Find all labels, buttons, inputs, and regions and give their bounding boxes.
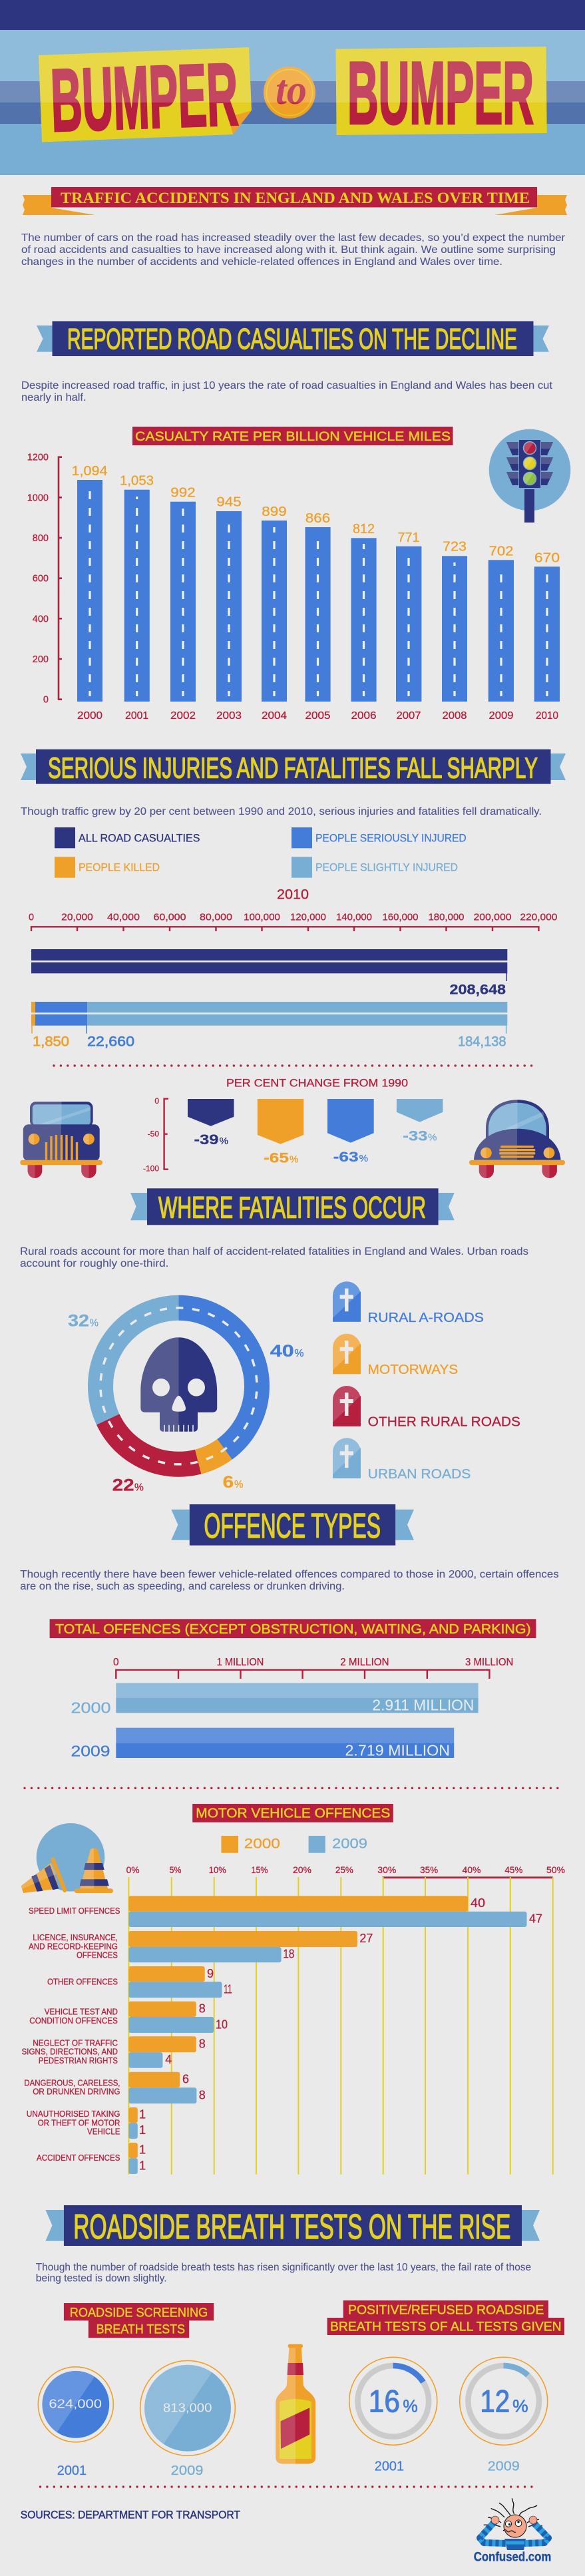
row: dangerous driving: OR DRUNKEN DRIVING xyxy=(33,2087,120,2097)
label 6%: 6 xyxy=(223,1473,234,1492)
shield: slightly injured: -33 xyxy=(403,1128,427,1144)
icon: traffic cones xyxy=(21,1823,113,1893)
fallen cone xyxy=(21,1859,65,1893)
icon: truck xyxy=(20,1102,102,1178)
chart year: 2010 xyxy=(277,887,309,903)
section text: fatalities: Rural roads account for more than half of accident-related fatalities in England and Wales. Urban roads xyxy=(20,1246,528,1257)
row: unauthorised taking: 1 xyxy=(139,2123,146,2137)
x axis: 1 MILLION xyxy=(217,1657,264,1668)
tombstone: other rural roads xyxy=(333,1386,520,1430)
y axis: 400 xyxy=(33,614,49,624)
x axis: 20,000 xyxy=(61,912,93,923)
x axis xyxy=(29,912,557,931)
chart title: positive or refused tests: POSITIVE/REFUSED ROADSIDE xyxy=(348,2303,544,2318)
shield: slightly injured: % xyxy=(428,1132,437,1143)
bar 2001: 1,053 xyxy=(120,474,154,489)
x axis: 100,000 xyxy=(244,912,280,923)
row: neglect of traffic signs: PEDESTRIAN RIGHTS xyxy=(39,2056,118,2065)
label 40% xyxy=(270,1342,303,1361)
ring: 16% in 2001: % xyxy=(403,2396,418,2416)
bar 2003: 2003 xyxy=(216,710,242,722)
bar 2006: 2006 xyxy=(351,710,377,722)
legend: years: 2000 xyxy=(244,1835,280,1851)
row: dangerous driving: 6 xyxy=(182,2073,189,2086)
row: other offences: 9 xyxy=(207,1967,214,1980)
logo: Confused.com: Confused.com xyxy=(474,2550,551,2564)
intro text: of road accidents and casualties to have increased along with it. But think again. We outline some surprising xyxy=(21,244,556,256)
x axis xyxy=(126,1864,565,1878)
x axis: 15% xyxy=(252,1864,268,1875)
ring: 12% in 2009: 2009 xyxy=(488,2459,520,2473)
circle: 624,000 tests in 2001: 2001 xyxy=(57,2464,87,2478)
row: dangerous driving: DANGEROUS, CARELESS, xyxy=(24,2078,120,2087)
y axis: 1200 xyxy=(27,453,49,463)
x axis: 10% xyxy=(209,1864,226,1875)
section text: casualties xyxy=(21,380,553,403)
circle: 813,000 tests in 2009 xyxy=(140,2360,235,2478)
bar 2000 xyxy=(72,464,108,722)
x axis: 0 xyxy=(113,1657,119,1668)
section text: offences: Though recently there have been fewer vehicle-related offences compared to those in 2000, certain offences xyxy=(20,1569,559,1580)
bar 2000 xyxy=(71,1683,479,1716)
row: other offences: 11 xyxy=(224,1982,232,1996)
logo: Confused.com xyxy=(474,2498,551,2564)
bar 2003 xyxy=(216,495,242,722)
legend: casualty types: ALL ROAD CASUALTIES xyxy=(79,833,200,845)
row: vehicle test: 8 xyxy=(199,2002,206,2016)
tombstone: other rural roads: OTHER RURAL ROADS xyxy=(368,1415,520,1430)
bar 2001 xyxy=(120,474,154,722)
row: neglect of traffic signs: 8 xyxy=(199,2037,206,2050)
icon: car xyxy=(469,1100,565,1178)
chart: per cent change from 1990 xyxy=(143,1078,443,1173)
title sign: BUMPER left: BUMPER xyxy=(49,45,240,150)
bar 2008: 2008 xyxy=(442,710,467,722)
shield: all casualties xyxy=(188,1099,234,1148)
intro text: changes in the number of accidents and vehicle-related offences in England and Wales over time. xyxy=(21,256,502,268)
x axis: 180,000 xyxy=(429,912,465,923)
x axis: 35% xyxy=(420,1864,438,1875)
y axis xyxy=(143,1096,168,1173)
row: dangerous driving xyxy=(24,2072,206,2103)
bar 2009 xyxy=(71,1728,454,1760)
bar: all road casualties: 208,648 xyxy=(450,982,506,997)
x axis: 3 MILLION xyxy=(465,1657,513,1668)
bar 2003: 945 xyxy=(216,495,242,510)
bar 2010: 670 xyxy=(534,550,560,565)
bar 2005: 2005 xyxy=(305,710,330,722)
bar 2007: 2007 xyxy=(397,710,421,722)
sources: SOURCES: DEPARTMENT FOR TRANSPORT xyxy=(21,2509,240,2521)
x axis: 20% xyxy=(293,1864,311,1875)
y axis: -50 xyxy=(148,1129,159,1138)
x axis: 0 xyxy=(29,912,34,923)
bar 2005 xyxy=(305,511,331,722)
section text: fatalities xyxy=(20,1246,528,1269)
bar 2009: 702 xyxy=(488,544,514,559)
coin: to: to xyxy=(276,66,307,113)
section heading: offence types xyxy=(171,1504,414,1546)
x axis: 40% xyxy=(462,1864,481,1875)
row: dangerous driving: 8 xyxy=(199,2088,206,2101)
section text: breath tests: Though the number of roadside breath tests has risen significantly over the last 10 years, the fail rate of those xyxy=(36,2262,531,2273)
x axis: 2 MILLION xyxy=(340,1657,389,1668)
row: licence, insurance: AND RECORD-KEEPING xyxy=(29,1942,118,1951)
y axis xyxy=(27,453,62,706)
x axis: 140,000 xyxy=(336,912,372,923)
x axis: 160,000 xyxy=(382,912,418,923)
legend: road types xyxy=(333,1281,520,1482)
x axis: 30% xyxy=(377,1864,396,1875)
legend: years xyxy=(221,1835,367,1853)
row: vehicle test xyxy=(29,2002,228,2033)
label 32% xyxy=(68,1312,98,1331)
shield: seriously injured xyxy=(327,1099,374,1165)
ring: 16% in 2001 xyxy=(349,2357,437,2473)
shield: killed: -65 xyxy=(264,1151,289,1166)
row: neglect of traffic signs: 4 xyxy=(165,2053,172,2066)
row: licence, insurance: 18 xyxy=(283,1948,294,1961)
bar: killed, seriously and slightly injured xyxy=(31,1002,507,1050)
intro text xyxy=(21,232,566,268)
bar chart: total offences xyxy=(71,1657,513,1760)
row: licence, insurance xyxy=(29,1931,373,1962)
ring: 12% in 2009 xyxy=(460,2357,548,2473)
legend: casualty types xyxy=(55,827,467,878)
chart title: roadside screening breath tests xyxy=(64,2303,214,2338)
section heading: where fatalities occur: WHERE FATALITIES OCCUR xyxy=(158,1190,426,1224)
shield: all casualties: % xyxy=(220,1136,228,1147)
row: neglect of traffic signs: NEGLECT OF TRAFFIC xyxy=(33,2038,118,2047)
bar 2000: 2.911 MILLION xyxy=(372,1696,474,1713)
bar 2000: 2000 xyxy=(71,1699,110,1716)
row: neglect of traffic signs xyxy=(21,2036,206,2068)
y axis: 0 xyxy=(154,1096,159,1106)
label 22%: % xyxy=(134,1482,144,1493)
chart title: casualty rate: CASUALTY RATE PER BILLION VEHICLE MILES xyxy=(135,429,451,444)
standing cone xyxy=(75,1848,113,1893)
label 6%: % xyxy=(234,1479,244,1490)
legend: casualty types: PEOPLE SERIOUSLY INJURED xyxy=(315,833,467,845)
bar chart: casualty rate xyxy=(27,453,560,722)
x axis xyxy=(113,1657,513,1679)
bar 2004: 2004 xyxy=(262,710,287,722)
row: speed limit: SPEED LIMIT OFFENCES xyxy=(29,1906,120,1916)
tombstone: rural A-roads xyxy=(333,1281,484,1325)
row: unauthorised taking: OR THEFT OF MOTOR xyxy=(38,2118,120,2127)
row: speed limit: 47 xyxy=(529,1912,542,1926)
section heading: where fatalities occur xyxy=(130,1188,455,1225)
row: speed limit: 40 xyxy=(471,1896,485,1910)
tombstone: urban roads: URBAN ROADS xyxy=(368,1467,471,1482)
chart title: motor vehicle offences: MOTOR VEHICLE OFFENCES xyxy=(196,1807,390,1821)
chart title: roadside screening breath tests: BREATH TESTS xyxy=(97,2322,185,2336)
row: accident offences: 1 xyxy=(139,2159,146,2172)
legend: casualty types: PEOPLE SLIGHTLY INJURED xyxy=(315,862,458,874)
coin: to xyxy=(264,66,315,118)
section text: injuries: Though traffic grew by 20 per cent between 1990 and 2010, serious injuries and fatalities fell dramatically. xyxy=(21,806,542,817)
ring: 16% in 2001: 16 xyxy=(369,2384,400,2419)
row: vehicle test: 10 xyxy=(216,2018,228,2031)
section text: breath tests xyxy=(36,2262,531,2284)
row: accident offences: 1 xyxy=(139,2143,146,2157)
row: other offences: OTHER OFFENCES xyxy=(47,1978,118,1987)
bar 2000: 2000 xyxy=(77,710,102,722)
header: title panel xyxy=(0,0,585,175)
x axis: 40,000 xyxy=(107,912,140,923)
bar 2006: 812 xyxy=(353,522,375,537)
row: vehicle test: CONDITION OFFENCES xyxy=(29,2016,118,2026)
x axis: 220,000 xyxy=(520,912,557,923)
label 22% xyxy=(112,1476,144,1494)
x axis: 200,000 xyxy=(474,912,511,923)
chart: 2010 casualties xyxy=(29,887,557,1050)
section text: offences xyxy=(20,1569,559,1592)
row: licence, insurance: LICENCE, INSURANCE, xyxy=(33,1933,118,1942)
bar 2004 xyxy=(262,505,287,722)
mascot xyxy=(480,2498,548,2550)
row: unauthorised taking xyxy=(27,2107,146,2139)
label 32%: % xyxy=(89,1318,98,1329)
row: accident offences xyxy=(37,2143,146,2174)
bar chart: motor vehicle offences xyxy=(21,1864,565,2175)
ring: 16% in 2001: 2001 xyxy=(375,2459,404,2473)
legend: years: 2009 xyxy=(332,1835,367,1851)
x axis: 25% xyxy=(335,1864,353,1875)
x axis: 5% xyxy=(169,1864,181,1875)
section heading: offence types: OFFENCE TYPES xyxy=(204,1507,381,1546)
tombstone: urban roads xyxy=(333,1438,471,1482)
intro text: The number of cars on the road has increased steadily over the last few decades, so you’d expect the number xyxy=(21,232,566,244)
circle: 624,000 tests in 2001 xyxy=(38,2367,113,2478)
bar: killed, seriously and slightly injured: 184,138 xyxy=(458,1034,506,1050)
chart title: total offences: TOTAL OFFENCES (EXCEPT OBSTRUCTION, WAITING, AND PARKING) xyxy=(55,1622,531,1637)
bar 2010 xyxy=(534,550,560,722)
bar: all road casualties xyxy=(31,949,507,997)
label 6% xyxy=(223,1473,244,1492)
chart title: positive or refused tests: BREATH TESTS OF ALL TESTS GIVEN xyxy=(330,2320,562,2334)
bar: killed, seriously and slightly injured: 22,660 xyxy=(87,1034,134,1050)
bar 2009: 2009 xyxy=(488,710,514,722)
row: other offences xyxy=(47,1966,232,1998)
bar 2007: 771 xyxy=(398,531,419,545)
icon: skull xyxy=(140,1337,217,1432)
subtitle ribbon: TRAFFIC ACCIDENTS IN ENGLAND AND WALES OVER TIME xyxy=(61,190,530,206)
shield: seriously injured: -63 xyxy=(333,1150,359,1165)
shield: seriously injured: % xyxy=(359,1153,368,1164)
row: unauthorised taking: 1 xyxy=(139,2108,146,2121)
chart heading: PER CENT CHANGE FROM 1990 xyxy=(226,1078,408,1090)
bar 2004: 899 xyxy=(262,505,287,519)
icon: traffic light xyxy=(489,429,570,523)
x axis: 60,000 xyxy=(153,912,186,923)
y axis: -100 xyxy=(143,1164,159,1173)
section text: offences: are on the rise, such as speeding, and careless or drunken driving. xyxy=(20,1581,345,1592)
shield: all casualties: -39 xyxy=(194,1132,218,1148)
row: licence, insurance: OFFENCES xyxy=(77,1950,118,1960)
tombstone: motorways: MOTORWAYS xyxy=(368,1363,458,1377)
row: unauthorised taking: UNAUTHORISED TAKING xyxy=(27,2109,120,2119)
bar 2006 xyxy=(351,522,377,722)
label 40%: 40 xyxy=(270,1342,294,1361)
bar 2008 xyxy=(442,540,467,722)
row: neglect of traffic signs: SIGNS, DIRECTIONS, AND xyxy=(21,2047,118,2057)
y axis: 1000 xyxy=(27,493,49,503)
bar 2009: 2.719 MILLION xyxy=(345,1741,450,1759)
circle: 624,000 tests in 2001: 624,000 xyxy=(49,2398,102,2411)
ring: 12% in 2009: 12 xyxy=(480,2384,510,2419)
label 22%: 22 xyxy=(112,1476,134,1494)
bar 2007 xyxy=(396,531,421,722)
row: unauthorised taking: VEHICLE xyxy=(87,2127,120,2137)
bar 2009: 2009 xyxy=(71,1743,110,1760)
row: licence, insurance: 27 xyxy=(359,1932,373,1945)
title sign: BUMPER left xyxy=(39,45,252,150)
shield: killed xyxy=(258,1099,303,1166)
section text: casualties: Despite increased road traffic, in just 10 years the rate of road casualties in England and Wales has been cut xyxy=(21,380,553,391)
circle: 813,000 tests in 2009: 813,000 xyxy=(163,2402,212,2415)
bar 2010: 2010 xyxy=(536,710,558,722)
section text: breath tests: being tested is down slightly. xyxy=(36,2272,167,2284)
legend: casualty types: PEOPLE KILLED xyxy=(79,862,160,874)
chart title: positive or refused tests xyxy=(327,2300,564,2335)
chart title: roadside screening breath tests: ROADSIDE SCREENING xyxy=(70,2306,208,2320)
ring: 12% in 2009: % xyxy=(512,2396,528,2416)
donut chart: fatalities by road type xyxy=(68,1305,303,1494)
tombstone: rural A-roads: RURAL A-ROADS xyxy=(368,1311,484,1325)
row: vehicle test: VEHICLE TEST AND xyxy=(45,2008,118,2017)
section text: casualties: nearly in half. xyxy=(21,392,87,403)
row: speed limit xyxy=(29,1896,542,1927)
subtitle ribbon xyxy=(23,187,567,215)
x axis: 0% xyxy=(126,1864,140,1875)
section text: fatalities: account for roughly one-third. xyxy=(20,1258,168,1269)
shield: killed: % xyxy=(290,1154,298,1166)
bar 2005: 866 xyxy=(305,511,330,526)
icon: bottle xyxy=(276,2344,315,2464)
x axis: 45% xyxy=(504,1864,522,1875)
x axis: 120,000 xyxy=(290,912,326,923)
x axis: 50% xyxy=(546,1864,565,1875)
y axis: 800 xyxy=(33,533,49,544)
bar: killed, seriously and slightly injured: 1,850 xyxy=(33,1034,69,1050)
tombstone: motorways xyxy=(333,1334,458,1377)
shield: slightly injured xyxy=(397,1099,443,1144)
bar 2002: 2002 xyxy=(170,710,196,722)
label 40%: % xyxy=(294,1348,303,1359)
bar 2008: 723 xyxy=(443,540,467,554)
bar 2009 xyxy=(488,544,514,722)
bar 2002 xyxy=(170,486,196,722)
y axis: 200 xyxy=(33,654,49,665)
circle: 813,000 tests in 2009: 2009 xyxy=(171,2464,204,2478)
row: accident offences: ACCIDENT OFFENCES xyxy=(37,2153,120,2163)
x axis: 80,000 xyxy=(200,912,232,923)
bar 2002: 992 xyxy=(170,486,196,501)
bar 2000: 1,094 xyxy=(72,464,108,479)
y axis: 600 xyxy=(33,574,49,584)
label 32%: 32 xyxy=(68,1312,89,1331)
bar 2001: 2001 xyxy=(125,710,148,722)
y axis: 0 xyxy=(43,695,49,706)
